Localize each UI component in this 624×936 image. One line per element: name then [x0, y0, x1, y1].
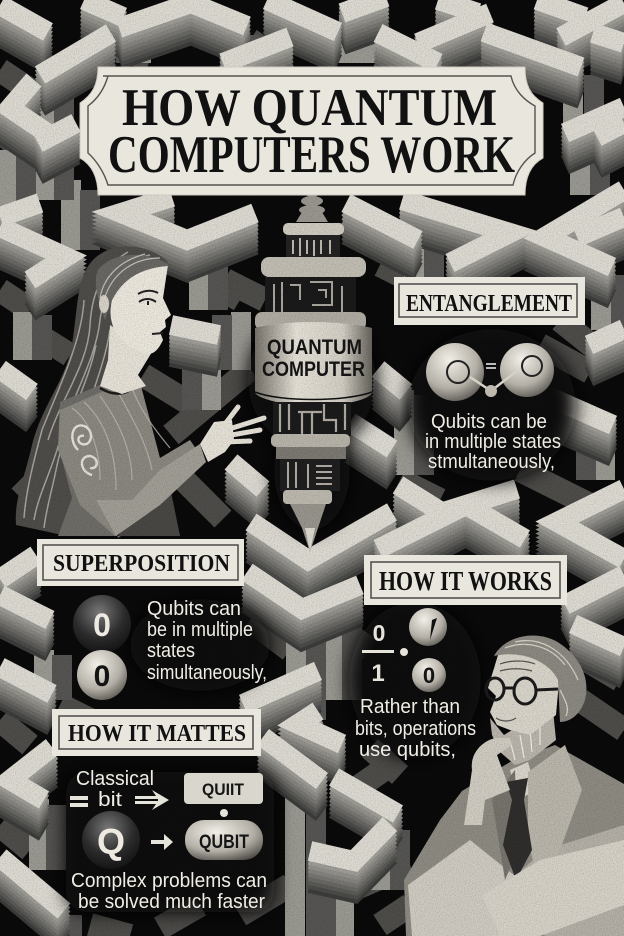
main cylinder with label: [255, 322, 372, 406]
panel: superposition: [37, 539, 267, 700]
illustration: woman presenting: [16, 246, 264, 538]
finial: [296, 187, 328, 222]
how it works text: [355, 696, 476, 761]
illustration: thinking scientist: [404, 635, 624, 936]
classical bit label: [70, 768, 154, 811]
heading: entanglement: ENTANGLEMENT: [406, 291, 572, 317]
title plaque: [80, 67, 543, 195]
main cylinder with label: COMPUTER: [262, 358, 365, 381]
entanglement text: [425, 411, 561, 473]
panel: how it works: [355, 555, 567, 761]
eye and mouth: [138, 291, 163, 334]
heading: how it works: [364, 555, 567, 605]
arrow: q to qubit: [151, 834, 173, 850]
diagram: bit fraction: 0: [373, 620, 385, 646]
icon: qubit states: 0: [423, 663, 435, 688]
hair: [494, 635, 586, 722]
lower circuit drum: [280, 459, 340, 491]
superposition text: states: [147, 640, 195, 662]
darkened zones behind body text: [66, 310, 576, 912]
lower circuits: [273, 402, 351, 436]
folded arm: [482, 840, 624, 936]
superposition text: Qubits can: [147, 598, 241, 620]
how it works text: use qubits,: [359, 739, 456, 761]
upper drum: [286, 235, 340, 258]
glasses: [486, 678, 558, 704]
torso and dress: [58, 385, 180, 538]
sleeve spirals: [72, 425, 97, 475]
heading: superposition: SUPERPOSITION: [53, 551, 231, 577]
how it works text: Rather than: [360, 696, 460, 718]
mid disk: [261, 257, 366, 277]
beard: [490, 700, 556, 765]
icon: qubit 0 dark: 0: [93, 607, 111, 643]
panel: entanglement: [394, 277, 585, 473]
how it works text: bits, operations: [355, 718, 476, 740]
icon: qubit states: [409, 608, 447, 692]
upper ring: [255, 312, 366, 330]
box: quiit: QUIIT: [202, 780, 245, 799]
hand at chin: [464, 738, 512, 825]
hair over forehead: [96, 255, 168, 320]
entanglement text: Qubits can be: [431, 411, 547, 433]
shirt: [510, 762, 536, 800]
lower ring: [283, 490, 332, 504]
diagram: bit fraction: 1: [371, 660, 385, 687]
hair: [16, 246, 168, 535]
classical bit label: bit: [98, 789, 123, 811]
heading: superposition: [37, 539, 244, 586]
icon: q qubit ball: [82, 811, 140, 869]
upper disk: [283, 223, 344, 235]
icon: q qubit ball: Q: [97, 821, 125, 862]
how it matters text: [71, 870, 267, 913]
heading: how it works: HOW IT WORKS: [379, 566, 552, 596]
pill: qubit: QUBIT: [199, 832, 249, 853]
title plaque: COMPUTERS WORK: [108, 126, 515, 184]
heading: how it mattes: HOW IT MATTES: [68, 721, 246, 747]
title text: HOW QUANTUM: [122, 79, 497, 137]
icon: qubit 0 light: 0: [94, 660, 110, 693]
head and face: [488, 650, 560, 735]
entanglement text: in multiple states: [425, 431, 561, 453]
heading: how it mattes: [52, 709, 261, 756]
jacket: [404, 745, 624, 936]
entanglement text: stmultaneously,: [428, 451, 555, 473]
lapels: [528, 745, 582, 890]
diagram: bit fraction: [362, 620, 408, 687]
how it matters text: be solved much faster: [78, 891, 265, 913]
superposition text: simultaneously,: [147, 662, 267, 684]
arrow: bit to quiit: [135, 790, 169, 810]
cylinder label: QUANTUM: [267, 336, 362, 359]
arm and hand: [96, 444, 206, 536]
panel: how it matters: [52, 709, 267, 913]
how it matters text: Complex problems can: [71, 870, 267, 892]
superposition text: [147, 598, 267, 684]
heading: entanglement: [394, 277, 585, 325]
neck: [100, 325, 152, 394]
face: [110, 264, 171, 354]
tie: [503, 778, 532, 880]
illustration: quantum computer tower: [255, 187, 372, 552]
circuit drum: [265, 277, 356, 317]
classical bit label: Classical: [76, 768, 154, 790]
icon: entangled qubits: [426, 343, 554, 401]
pill: qubit: [185, 820, 263, 860]
icon: qubit 0 light: [77, 650, 127, 700]
superposition text: be in multiple: [147, 619, 253, 641]
box: quiit: [184, 773, 263, 804]
icon: qubit 0 dark: [73, 595, 131, 653]
drill tip: [290, 504, 326, 552]
lower disk: [271, 434, 350, 447]
